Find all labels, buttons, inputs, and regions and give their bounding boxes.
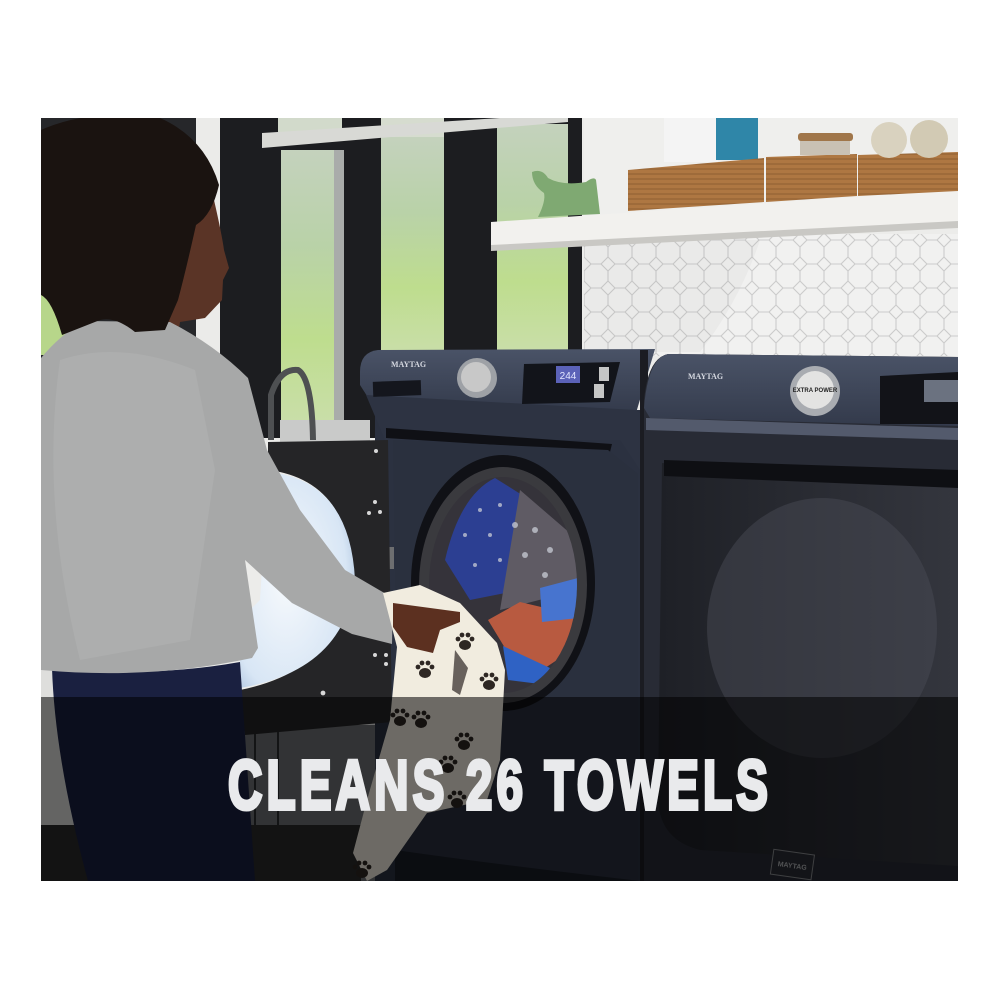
towel	[353, 585, 505, 881]
shelf	[491, 216, 703, 245]
open washer door	[240, 440, 392, 735]
sweater	[41, 321, 393, 673]
door hinge	[390, 547, 394, 569]
caption band	[41, 697, 958, 881]
dog figurine	[532, 171, 600, 217]
blue bottle	[716, 118, 758, 160]
brand label: MAYTAG	[391, 360, 426, 369]
face and neck	[168, 200, 229, 327]
hand	[393, 603, 460, 653]
photo	[41, 115, 958, 881]
faucet	[271, 370, 313, 440]
baskets	[628, 152, 958, 211]
display	[880, 372, 958, 424]
dial	[790, 366, 840, 416]
dryer balls	[871, 120, 948, 158]
background wall and windows	[41, 118, 958, 881]
washer	[360, 349, 655, 881]
nameplate: MAYTAG	[777, 861, 808, 872]
woman	[41, 115, 393, 881]
white jug	[664, 118, 718, 162]
control display: 244	[560, 371, 577, 382]
detergent drawer	[373, 380, 421, 397]
infographic scene	[41, 118, 958, 881]
headline: CLEANS 26 TOWELS	[228, 746, 768, 824]
pedestal	[395, 850, 640, 881]
trousers	[52, 662, 255, 881]
brand label: MAYTAG	[688, 372, 723, 381]
control display	[522, 362, 620, 404]
dryer drum shadow	[707, 498, 937, 758]
tile wall and shelf	[491, 118, 958, 356]
door opening	[411, 455, 595, 711]
dryer	[640, 350, 958, 881]
cycle dial	[457, 358, 497, 398]
jar	[798, 133, 853, 155]
hair	[41, 115, 219, 335]
dial: EXTRA POWER	[793, 388, 838, 394]
nameplate	[770, 849, 814, 880]
